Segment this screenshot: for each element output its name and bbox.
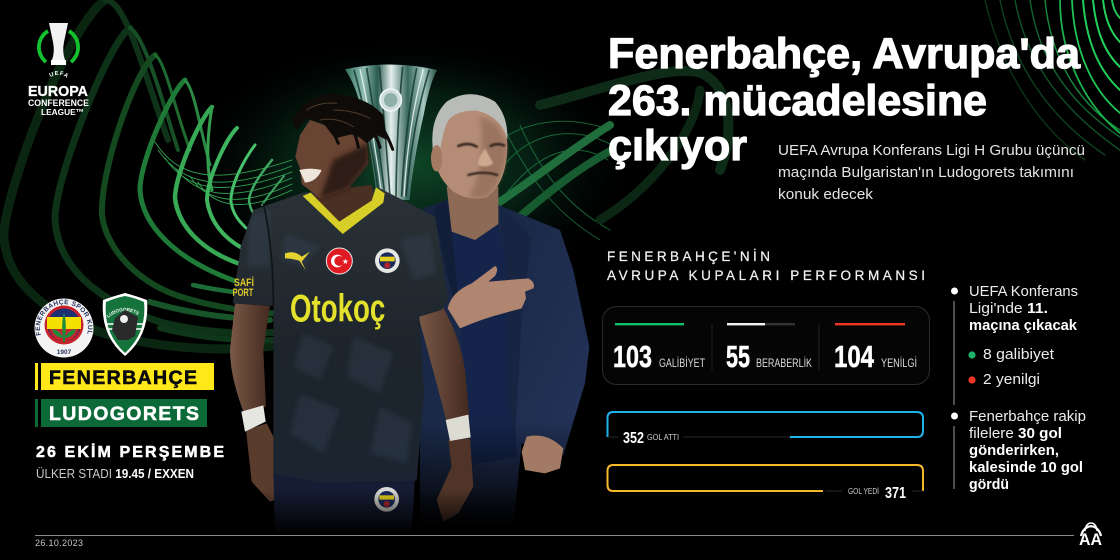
badge: Turkish flag: [326, 248, 352, 274]
shorts: [273, 473, 415, 533]
section heading: [607, 249, 925, 283]
title: çıkıyor: [608, 122, 747, 170]
panel: match record: [602, 306, 930, 384]
lapel: [498, 205, 532, 437]
sleeve sponsor: [233, 276, 254, 299]
badge: Fenerbahçe chest: [375, 248, 400, 273]
right arm: [418, 305, 469, 422]
jacket: [420, 200, 589, 527]
stat: wins: GALİBİYET: [659, 357, 705, 370]
team label: Fenerbahçe: FENERBAHÇE: [49, 367, 197, 389]
face: [295, 120, 368, 198]
bullet: league matches: maçına çıkacak: [969, 318, 1078, 334]
title: 263. mücadelesine: [608, 77, 987, 125]
hand on chest: [448, 266, 534, 328]
neck: [313, 185, 374, 228]
badge: Turkish flag: ★: [342, 257, 349, 266]
bullet: goals: [951, 409, 1086, 493]
background: green ribbons: [4, 0, 1120, 349]
hair: [292, 93, 387, 143]
stat: losses: YENİLGİ: [881, 357, 917, 370]
dreadlocks: [330, 110, 393, 149]
footer rule: [35, 534, 1074, 536]
stat: 2 losses: 2 yenilgi: [983, 372, 1040, 388]
smile: [299, 169, 322, 183]
crest: Ludogorets: LUDOGORETS: [106, 308, 139, 318]
icon: AA logo: [1079, 523, 1102, 549]
team label: Ludogorets: [35, 399, 207, 427]
stat: draws: [726, 323, 812, 374]
sleeve sponsor: PORT: [233, 287, 254, 299]
logo: UEFA Europa Conference League: [28, 23, 89, 117]
lower hand: [522, 436, 563, 473]
venue and time: ÜLKER STADI 19.45 / EXXEN: [36, 467, 194, 481]
CONFERENCE: CONFERENCE: [28, 98, 89, 108]
section heading: AVRUPA KUPALARI PERFORMANSI: [607, 268, 925, 283]
subtitle: UEFA Avrupa Konferans Ligi H Grubu üçüncü: [778, 142, 1085, 159]
stat: wins: [613, 323, 705, 374]
collar: [303, 187, 385, 234]
trophy illustration: [345, 64, 437, 200]
stat: 8 wins: 8 galibiyet: [983, 347, 1054, 363]
wristbands: [241, 405, 266, 432]
shorts badge: [374, 487, 399, 512]
stat: losses: 104: [834, 340, 874, 374]
match date: 26 EKİM PERŞEMBE: [36, 443, 224, 461]
jersey: [233, 188, 448, 483]
photo: player: [230, 93, 473, 533]
sleeve sponsor: SAFİ: [234, 276, 254, 289]
UEFA: UEFA: [49, 71, 68, 78]
hair: [432, 94, 507, 153]
subtitle: konuk edecek: [778, 186, 873, 203]
subtitle: [778, 142, 1085, 203]
stat: draws: BERABERLİK: [756, 357, 812, 370]
team label: Ludogorets: LUDOGORETS: [49, 403, 199, 425]
sleeve seam: [263, 203, 273, 306]
crest: Fenerbahçe: 1907: [57, 349, 72, 356]
ear: [431, 145, 442, 172]
chart: goals scored: 352: [623, 430, 644, 447]
bullet: goals: gönderirken,: [969, 443, 1059, 459]
timeline notes: [951, 284, 1086, 493]
left arm: [230, 303, 270, 413]
bullet: league matches: UEFA Konferans: [969, 284, 1078, 300]
chart: goals conceded: [608, 465, 923, 502]
date: 26.10.2023: [35, 538, 83, 548]
sponsor: Otokoç: Otokoç: [290, 287, 385, 331]
bullet: goals: Fenerbahçe rakip: [969, 409, 1086, 425]
lower fade: [417, 420, 593, 533]
team label: Fenerbahçe: [35, 363, 214, 390]
eyes and mouth: [458, 144, 504, 175]
head: [433, 102, 507, 199]
puma logo: [285, 252, 310, 271]
icon: AA logo: AA: [1079, 530, 1102, 549]
neck: [447, 187, 498, 240]
stat: wins: 103: [613, 340, 652, 374]
title: [608, 30, 1081, 170]
LEAGUE: LEAGUE™: [41, 107, 84, 117]
bullet: goals: gördü: [969, 477, 1009, 493]
bullet: goals: filelere 30 gol: [969, 426, 1062, 442]
EUROPA: EUROPA: [28, 84, 89, 100]
bullet: goals: kalesinde 10 gol: [969, 460, 1083, 476]
t-shirt: [452, 225, 517, 465]
crest: Ludogorets: [102, 293, 148, 356]
chart: goals conceded: GOL YEDİ: [848, 486, 879, 496]
title: Fenerbahçe, Avrupa'da: [608, 30, 1081, 78]
bullet: league matches: Ligi'nde 11.: [969, 301, 1048, 317]
photo: coach: [417, 94, 593, 533]
bullet: league matches: [951, 284, 1078, 334]
icon: trophy: [49, 23, 68, 60]
chart: goals conceded: 371: [885, 485, 906, 502]
stat: draws: 55: [726, 340, 750, 374]
top right arcs: [985, 0, 1120, 160]
section heading: FENERBAHÇE'NİN: [607, 249, 770, 264]
crest: Fenerbahçe: [34, 298, 94, 358]
chart: goals scored: [608, 412, 923, 447]
subtitle: maçında Bulgaristan'ın Ludogorets takımını: [778, 164, 1074, 181]
chart: goals scored: GOL ATTI: [647, 432, 679, 442]
icon: green ring: [39, 31, 78, 62]
stat: losses: [834, 323, 917, 374]
jersey texture: [247, 210, 437, 463]
